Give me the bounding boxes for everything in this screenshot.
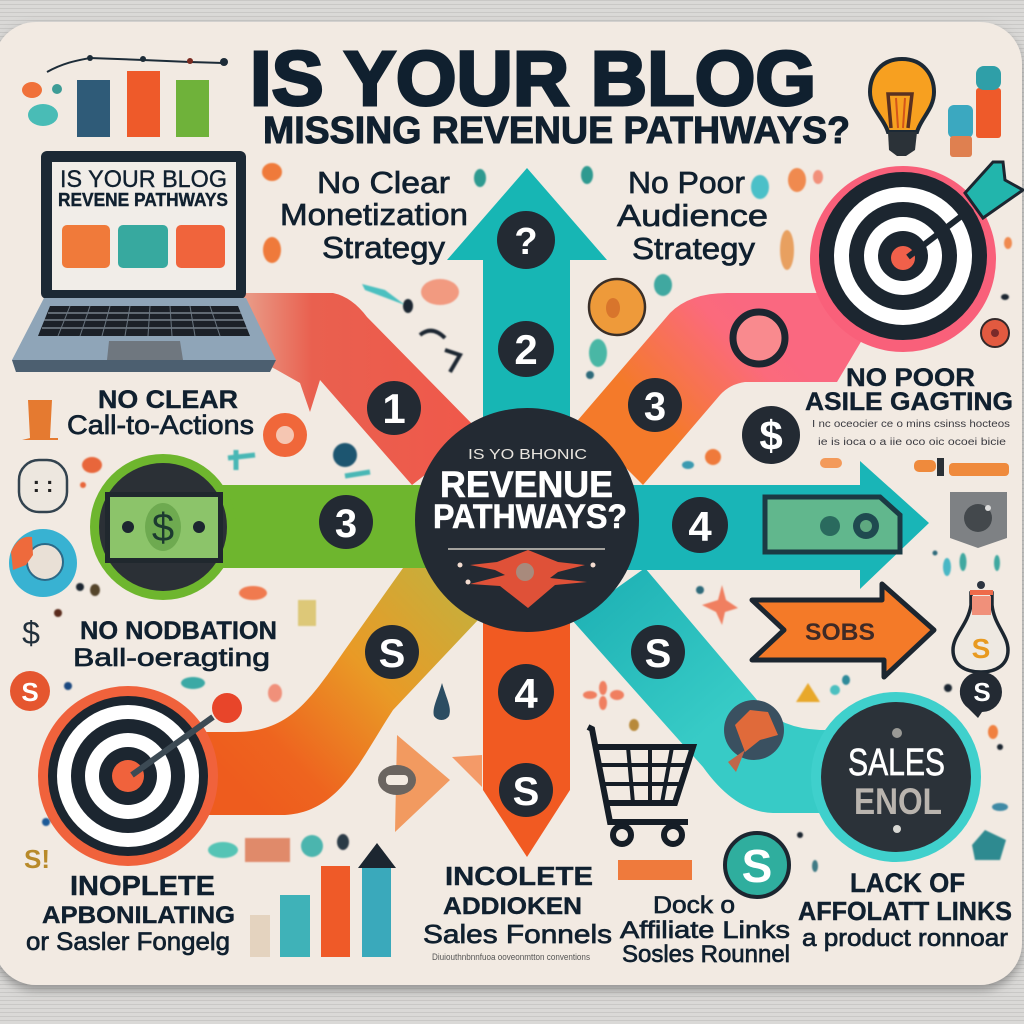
icon: dollar coin: S [742,840,772,892]
text: Lack of: LACK OF [850,868,965,898]
text: No Clear Monetization Strategy: No Clear [317,165,450,200]
icon: red S badge: S [21,677,39,707]
number badge: S bottom: S [513,770,539,814]
icon: laptop: REVENE PATHWAYS [58,190,228,210]
icon: orange circle [263,413,307,457]
number badge: 4 bottom: 4 [514,670,538,717]
icon: money bill on teal arrow [765,497,900,552]
text: No Poor Asile Gagting: ie is ioca o a iie oco oic ocoei bicie [818,437,1007,448]
number badge: 3 right [628,378,682,432]
text: Dock of: Dock o [653,892,735,919]
icon: laptop [12,151,276,372]
text: No Clear Call-to-Actions: Call-to-Actions [67,410,254,440]
icon: donut [9,529,77,597]
number badge: S left [365,625,419,679]
icon: bottle: S [972,633,990,664]
icon: light bulb [870,59,934,156]
arrow: orange SOBS [752,584,934,677]
arrow: orange down [483,610,570,857]
center circle: PATHWAYS? [433,498,627,536]
text: Dock of [620,892,790,968]
number badge: 3 right: 3 [644,385,666,429]
decoration: orange bars [820,458,1009,476]
icon: small bars top right [948,66,1001,157]
decoration: scattered confetti [42,163,1012,872]
text: No Poor Asile Gagting: ASILE GAGTING [805,388,1013,416]
icon: shopping cart [588,727,693,844]
number badge: 2 [498,321,554,377]
text: Lack of: AFFOLATT LINKS [798,896,1012,926]
text: Incolete: Sales Fonnels [423,919,612,949]
icon: outlined badge: : : [33,472,53,497]
icon: S mark gold: S! [24,844,50,874]
arrow: orange SOBS: SOBS [805,619,875,646]
number badge: 4 right: 4 [688,503,712,550]
badge: sales funnel: SALES [848,742,945,784]
number badge: S left: S [379,632,405,676]
text: Incolete: ADDIOKEN [443,893,582,920]
arrow: orange-pink pathway [578,293,862,485]
text: Inoplete: APBONILATING [42,902,235,929]
icon: money circle [90,454,236,600]
icon: orange block [618,860,692,880]
number badge: question mark: ? [514,221,538,263]
icon: money circle: $ [152,506,174,550]
number badge: 1: 1 [382,385,406,432]
text: Incolete [423,861,612,962]
text: Dock of: Affiliate Links [620,917,790,944]
icon: bar chart top left [22,55,228,137]
text: Lack of: a product ronnoar [802,925,1008,952]
text: No Clear Call-to-Actions: NO CLEAR [98,386,238,414]
title: IS YOUR BLOG [250,36,816,122]
number badge: 4 right [672,497,728,553]
icon: orange figure [22,400,58,440]
icon: teardrop [434,683,450,720]
subtitle: MISSING REVENUE PATHWAYS? [263,110,850,152]
number badge: 3 left: 3 [335,502,357,546]
text: No Nodbation Ball-oeragting: Ball-oeragting [73,644,270,672]
text: No Poor Asile Gagting [805,364,1013,448]
text: No Clear Monetization Strategy [280,165,468,265]
text: No Nodbation Ball-oeragting [73,617,277,672]
title [250,36,850,152]
icon: target lower left [38,686,242,866]
text: Incolete: INCOLETE [445,861,593,891]
text: No Clear Call-to-Actions [67,386,254,440]
arrow: green pathway [190,485,450,568]
number badge: dollar: $ [759,412,783,459]
arrow: yellow-orange pathway [205,568,480,815]
decoration: bits above bars [208,834,349,862]
text: Inoplete: or Sasler Fongelg [26,928,230,956]
icon: dollar sign: $ [22,615,40,651]
center circle [415,408,639,632]
center circle: IS YO BHONIC [468,446,587,463]
number badge: 1 [367,381,421,435]
text: No Poor Asile Gagting: NO POOR [846,364,975,392]
icon: red S badge [10,671,50,711]
number badge: S bottom [499,763,553,817]
number badge: S right: S [645,632,671,676]
number badge: S right [631,625,685,679]
text: No Poor Audience Strategy: Audience [617,198,768,233]
laptop screen text: IS YOUR BLOG [60,166,227,193]
text: Lack of [798,868,1012,952]
arrow: teal right [620,461,929,589]
number badge: 4 bottom [498,664,554,720]
arrow: teal lower pathway [572,568,835,813]
center circle: REVENUE [440,464,613,505]
badge: sales funnel [811,692,981,862]
chart: bottom bars [250,843,396,957]
number badge: 3 left [319,495,373,549]
text: No Poor Audience Strategy [617,165,768,266]
icon: dollar bubble: S [973,677,991,707]
text: Incolete: Diuiouthnbnnfuoa ooveonmtton conventions [432,952,590,962]
text: No Poor Asile Gagting: I nc oceocier ce o mins csinss hocteos [812,419,1010,430]
icon: pink badge [733,312,785,364]
text: No Poor Audience Strategy: Strategy [632,231,756,266]
icon: target top right [810,162,1023,352]
arrow: red pathway [240,293,480,485]
number badge: dollar [742,406,800,464]
icon: outlined badge [19,460,67,512]
icon: bottle [953,581,1008,672]
number badge: 2: 2 [514,326,538,373]
icon: red badge lower [724,700,784,772]
icon: dollar coin [725,833,789,897]
text: No Nodbation Ball-oeragting: NO NODBATION [80,617,277,645]
icon: orange triangles [378,735,482,832]
text: Inoplete: INOPLETE [70,870,215,901]
icon: gray box [950,492,1007,548]
text: No Clear Monetization Strategy: Monetization [280,197,468,232]
text: Dock of: Sosles Rounnel [622,941,790,968]
text: Inoplete [26,870,235,956]
badge: sales funnel: ENOL [854,781,942,822]
arrow: teal up [447,168,607,430]
icon: dollar bubble [960,672,1002,718]
text: No Clear Monetization Strategy: Strategy [322,230,446,265]
icon: small red badge [981,319,1009,347]
number badge: question mark [497,211,555,269]
icon: coin [589,279,645,335]
text: No Poor Audience Strategy: No Poor [628,165,745,200]
